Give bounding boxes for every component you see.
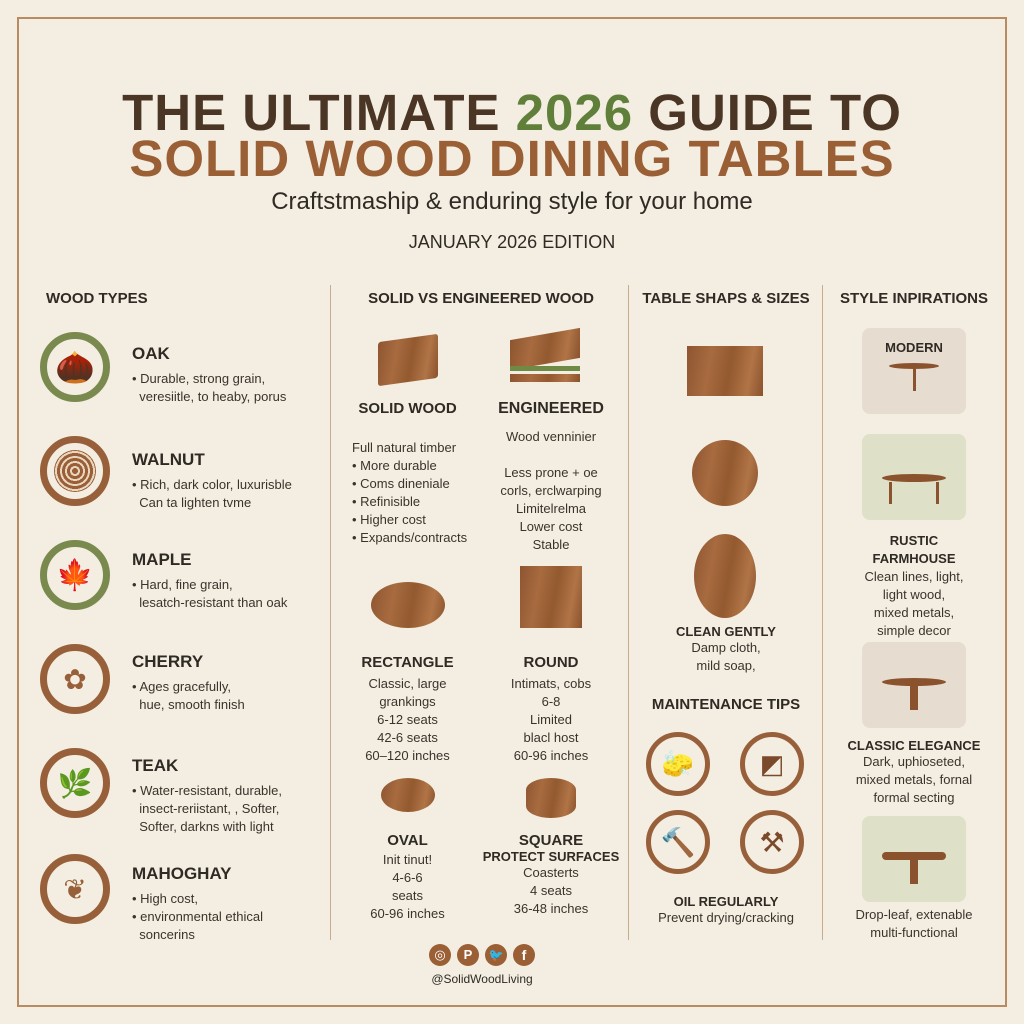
panel: style inspirations: multi-functional	[870, 925, 958, 940]
solid wood text: SOLID WOOD	[358, 400, 457, 417]
engineered text: Less prone + oe	[504, 465, 598, 480]
drop-leaf	[862, 816, 966, 902]
panel: style inspirations: light wood,	[883, 587, 945, 602]
maintenance icons: ◩	[760, 748, 784, 778]
heading: SOLID VS ENGINEERED WOOD	[368, 290, 594, 307]
rectangle shape: 60–120 inches	[365, 748, 450, 763]
title: THE ULTIMATE 2026 GUIDE TO	[122, 84, 902, 141]
square shape	[483, 778, 619, 916]
engineered text: corls, erclwarping	[500, 483, 602, 498]
oval shape: OVAL	[387, 832, 428, 849]
oak: OAK	[132, 344, 170, 363]
panel: style inspirations: mixed metals,	[874, 605, 954, 620]
panel: style inspirations: Dark, uphioseted,	[863, 754, 965, 769]
panel: style inspirations: RUSTIC	[890, 533, 938, 548]
cherry	[40, 644, 245, 714]
rectangle shape: 6-12 seats	[377, 712, 438, 727]
engineered text: Lower cost	[520, 519, 582, 534]
modern: MODERN	[885, 340, 943, 355]
engineered text: Limitelrelma	[516, 501, 586, 516]
maintenance heading: MAINTENANCE TIPS	[652, 696, 800, 713]
rectangle shape: RECTANGLE	[361, 654, 454, 671]
title: SOLID WOOD DINING TABLES	[129, 130, 895, 187]
solid wood text: • Refinisible	[352, 494, 420, 509]
square shape: 36-48 inches	[514, 901, 588, 916]
solid wood text: • Coms dineniale	[352, 476, 450, 491]
oil regularly: Prevent drying/cracking	[658, 910, 794, 925]
engineered text: ENGINEERED	[498, 400, 604, 417]
walnut	[40, 436, 292, 510]
maintenance icons: 🔨	[661, 826, 695, 858]
maple: 🍁	[56, 558, 94, 592]
panel: style inspirations	[840, 290, 988, 940]
oak	[40, 332, 286, 404]
walnut: WALNUT	[132, 450, 205, 469]
round shape	[511, 566, 591, 763]
panel: wood types: soncerins	[139, 927, 195, 942]
panel: solid vs engineered	[352, 290, 619, 921]
classic elegance	[862, 642, 966, 728]
clean gently	[676, 624, 776, 673]
heading: TABLE SHAPS & SIZES	[642, 290, 810, 307]
title	[122, 84, 902, 187]
round shape: 60-96 inches	[514, 748, 588, 763]
maple: • Hard, fine grain,	[132, 577, 233, 592]
engineered text: Stable	[533, 537, 569, 552]
rectangle shape: grankings	[379, 694, 436, 709]
teak: TEAK	[132, 756, 178, 775]
panel: wood types	[40, 290, 292, 942]
clean gently: CLEAN GENTLY	[676, 624, 776, 639]
dividers	[330, 285, 331, 940]
social icons	[429, 944, 535, 986]
square shape: SQUARE	[519, 832, 583, 849]
oak: 🌰	[55, 349, 95, 385]
round table	[692, 440, 758, 506]
mahogany: • environmental ethical	[132, 909, 263, 924]
oak: veresiitle, to heaby, porus	[139, 389, 286, 404]
engineered text	[498, 400, 604, 552]
rectangle table	[687, 346, 763, 396]
oval shape: 4-6-6	[392, 870, 423, 885]
icon: engineered layers	[510, 328, 580, 382]
cherry: CHERRY	[132, 652, 203, 671]
oil regularly	[658, 894, 794, 925]
mahogany: ❦	[63, 874, 87, 904]
oval shape: seats	[392, 888, 423, 903]
modern	[862, 328, 966, 414]
mahogany: • High cost,	[132, 891, 198, 906]
panel: wood types: Softer, darkns with light	[139, 819, 274, 834]
cherry: ✿	[63, 664, 87, 694]
panel: style inspirations: Drop-leaf, extenable	[855, 907, 973, 922]
cherry: • Ages gracefully,	[132, 679, 231, 694]
teak	[40, 748, 282, 834]
round shape: Intimats, cobs	[511, 676, 591, 691]
panel: style inspirations: mixed metals, fornal	[856, 772, 972, 787]
oval shape	[370, 778, 445, 921]
subtitle: Craftstmaship & enduring style for your home	[271, 188, 753, 215]
oil regularly: OIL REGULARLY	[674, 894, 778, 909]
round shape: Limited	[530, 712, 572, 727]
panel: style inspirations: CLASSIC ELEGANCE	[848, 738, 980, 753]
oak: • Durable, strong grain,	[132, 371, 265, 386]
round shape: 6-8	[542, 694, 560, 709]
solid wood text: • Expands/contracts	[352, 530, 467, 545]
social icons: f	[522, 947, 526, 963]
heading: STYLE INPIRATIONS	[840, 290, 988, 307]
maple	[40, 540, 288, 610]
solid wood text: Full natural timber	[352, 440, 456, 455]
mahogany: MAHOGHAY	[132, 864, 232, 883]
oval shape: 60-96 inches	[370, 906, 445, 921]
walnut: • Rich, dark color, luxurisble	[132, 477, 292, 492]
social icons: ◎	[434, 947, 446, 962]
edition: JANUARY 2026 EDITION	[409, 232, 615, 252]
social icons: P	[464, 947, 472, 962]
solid wood text: • More durable	[352, 458, 437, 473]
clean gently: mild soap,	[696, 658, 756, 673]
rectangle shape	[361, 582, 454, 763]
maintenance icons: ⚒	[759, 826, 785, 858]
rustic farmhouse	[862, 434, 966, 520]
round shape: ROUND	[524, 654, 578, 671]
square shape: Coasterts	[523, 865, 579, 880]
panel: style inspirations: simple decor	[877, 623, 951, 638]
engineered text: Wood venninier	[506, 429, 596, 444]
maintenance icons	[646, 732, 804, 874]
mahogany	[40, 854, 263, 942]
oval table	[694, 534, 756, 618]
cherry: hue, smooth finish	[139, 697, 245, 712]
icon: solid block	[378, 334, 438, 386]
panel: style inspirations: Clean lines, light,	[864, 569, 964, 584]
heading: WOOD TYPES	[46, 290, 148, 307]
walnut: Can ta lighten tvme	[139, 495, 251, 510]
panel: style inspirations: FARMHOUSE	[872, 551, 956, 566]
clean gently: Damp cloth,	[691, 640, 761, 655]
maple: MAPLE	[132, 550, 192, 569]
rectangle shape: Classic, large	[368, 676, 447, 691]
social icons: @SolidWoodLiving	[431, 972, 533, 986]
rectangle shape: 42-6 seats	[377, 730, 438, 745]
square shape: 4 seats	[530, 883, 572, 898]
oval shape: Init tinut!	[383, 852, 432, 867]
maintenance icons: 🧽	[662, 748, 694, 778]
solid wood text: • Higher cost	[352, 512, 426, 527]
square shape: PROTECT SURFACES	[483, 849, 619, 864]
teak: • Water-resistant, durable,	[132, 783, 282, 798]
teak: 🌿	[58, 768, 92, 798]
teak: insect-reriistant, , Softer,	[139, 801, 279, 816]
panel: style inspirations: formal secting	[874, 790, 954, 805]
social icons: 🐦	[489, 948, 503, 962]
maple: lesatch-resistant than oak	[139, 595, 287, 610]
solid wood text	[352, 400, 467, 545]
round shape: blacl host	[524, 730, 578, 745]
panel: table shapes & maintenance	[642, 290, 810, 925]
